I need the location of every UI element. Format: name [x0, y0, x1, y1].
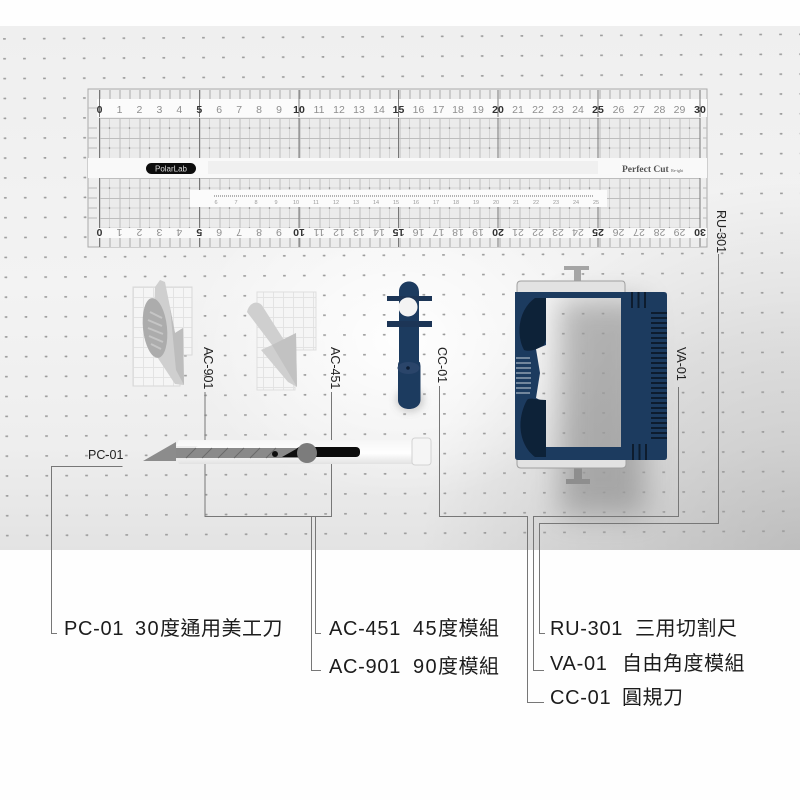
ruler bottom inverted scale numbers: 5	[196, 226, 202, 238]
connector lines	[52, 254, 718, 702]
legend: CC-01: 圓規刀	[622, 686, 684, 709]
ruler bottom inverted scale numbers: 13	[353, 226, 365, 238]
ruler top scale numbers: 5	[196, 104, 202, 116]
legend: VA-01: 自由角度模組	[622, 652, 745, 675]
connector: PC-01	[52, 466, 122, 634]
ruler top scale numbers: 10	[293, 104, 305, 116]
ruler bottom inverted scale numbers: 30	[694, 226, 706, 238]
ruler top scale numbers: 13	[353, 104, 365, 116]
ruler top scale numbers: 1	[117, 104, 123, 116]
ruler inner angle scale numbers: 13	[353, 200, 359, 206]
dark recesses	[519, 298, 546, 457]
bottom thumb screw	[566, 468, 590, 484]
ruler inner angle scale numbers: 8	[254, 200, 258, 206]
ruler bottom inverted scale numbers: 28	[654, 226, 665, 238]
ruler top scale numbers	[97, 104, 706, 116]
ruler top scale numbers: 16	[413, 104, 424, 116]
ruler bottom inverted scale numbers: 18	[452, 226, 464, 238]
ruler bottom inverted scale numbers: 22	[532, 226, 544, 238]
legend: PC-01: PC-01	[64, 618, 124, 640]
ruler top scale numbers: 15	[393, 104, 404, 116]
ruler inner angle scale numbers: 21	[513, 200, 519, 206]
ruler top scale numbers: 0	[97, 104, 103, 116]
ruler bottom inverted scale numbers: 4	[176, 226, 182, 238]
connector: RU-301	[540, 254, 718, 634]
ruler top scale numbers: 3	[156, 104, 162, 116]
panel: utility knife PC-01	[143, 438, 431, 465]
vertical vent slots	[632, 292, 646, 460]
legend: RU-301: 三用切割尺	[635, 617, 738, 640]
clear top and bottom plates	[517, 281, 626, 468]
vertical label: CC-01: CC-01	[435, 347, 449, 383]
ruler inner angle scale numbers: 18	[453, 200, 459, 206]
legend: VA-01	[550, 652, 745, 675]
vertical label: VA-01: VA-01	[674, 347, 688, 381]
ruler inner angle scale numbers: 12	[333, 200, 339, 206]
legend: RU-301	[550, 617, 738, 640]
PolarLab badge: PolarLab	[155, 164, 188, 174]
ruler inner angle scale numbers: 11	[313, 200, 319, 206]
ruler top scale numbers: 20	[492, 104, 504, 116]
legend: PC-01	[64, 617, 283, 640]
ruler top scale numbers: 22	[532, 104, 544, 116]
navy frame	[515, 292, 667, 460]
horizontal label: PC-01: PC-01	[88, 448, 123, 462]
ruler bottom inverted scale numbers	[96, 226, 706, 238]
ruler top scale numbers: 11	[314, 104, 325, 116]
ruler bottom inverted scale numbers: 1	[116, 226, 122, 238]
ruler top scale numbers: 25	[592, 104, 604, 116]
ruler bottom inverted scale numbers: 19	[472, 226, 484, 238]
ruler inner angle scale numbers: 9	[274, 200, 278, 206]
ruler bottom inverted scale numbers: 21	[512, 226, 524, 238]
ruler top scale numbers: 28	[654, 104, 665, 116]
ruler inner angle scale numbers: 15	[393, 200, 399, 206]
connector: AC-901 to label	[312, 516, 321, 670]
ruler top scale numbers: 18	[452, 104, 464, 116]
vertical label: AC-901: AC-901	[201, 347, 215, 389]
blade slot and blade segments	[176, 448, 300, 458]
vertical label: AC-451: AC-451	[328, 347, 342, 389]
ruler bottom inverted scale numbers: 10	[293, 226, 305, 238]
ruler bottom inverted scale numbers: 14	[373, 226, 385, 238]
left grip teeth	[516, 358, 531, 393]
ruler bottom inverted scale numbers: 26	[613, 226, 624, 238]
right vent slots	[651, 313, 667, 438]
ruler bottom inverted scale numbers: 24	[572, 226, 584, 238]
ruler bottom inverted scale numbers: 3	[156, 226, 162, 238]
ruler bottom inverted scale numbers: 8	[256, 226, 262, 238]
ruler top scale numbers: 26	[613, 104, 624, 116]
ruler bottom inverted scale numbers: 16	[413, 226, 424, 238]
ruler top scale numbers: 6	[216, 104, 222, 116]
ruler bottom inverted scale numbers: 7	[236, 226, 242, 238]
legend: CC-01: CC-01	[550, 687, 611, 709]
ruler bottom inverted scale numbers: 12	[333, 226, 345, 238]
ruler top scale numbers: 14	[373, 104, 385, 116]
ruler top scale numbers: 19	[472, 104, 484, 116]
ruler inner angle scale numbers: 6	[214, 200, 218, 206]
ruler bottom inverted scale numbers: 15	[393, 226, 404, 238]
ruler top scale numbers: 2	[136, 104, 142, 116]
knife blade	[143, 442, 176, 461]
connector: CC-01	[440, 386, 544, 702]
ruler inner angle scale numbers: 7	[234, 200, 238, 206]
legend: AC-451	[329, 617, 500, 640]
ruler top scale numbers: 24	[572, 104, 584, 116]
ruler bottom inverted scale numbers: 25	[592, 226, 604, 238]
panel: ruler RU-301	[88, 89, 707, 247]
ruler top scale numbers: 8	[256, 104, 262, 116]
slider slot	[296, 447, 360, 457]
ruler inner angle scale numbers: 19	[473, 200, 479, 206]
legend: AC-901	[329, 655, 500, 678]
connector: AC-451 to label	[316, 516, 321, 634]
ruler top scale numbers: 12	[333, 104, 345, 116]
ruler top scale numbers: 17	[433, 104, 444, 116]
ruler bottom inverted scale numbers: 9	[276, 226, 282, 238]
ruler bottom inverted scale numbers: 11	[313, 226, 324, 238]
ruler inner angle scale numbers: 10	[293, 200, 299, 206]
ruler bottom inverted scale numbers: 29	[674, 226, 685, 238]
legend: CC-01	[550, 686, 684, 709]
connector: VA-01	[534, 387, 678, 670]
ruler bottom inverted scale numbers: 6	[216, 226, 222, 238]
ruler inner angle scale numbers: 17	[433, 200, 439, 206]
ruler bottom inverted scale numbers: 20	[492, 226, 504, 238]
top thumb screw	[564, 266, 589, 282]
ruler top scale numbers: 7	[236, 104, 242, 116]
legend: AC-451: AC-451	[329, 618, 401, 640]
panel: module AC-451	[247, 292, 316, 390]
legend: AC-901: AC-901	[329, 656, 401, 678]
end cap	[412, 438, 431, 465]
knife body	[176, 440, 414, 464]
connector: AC-901 and AC-451 bracket	[205, 392, 332, 516]
ruler inner angle scale numbers	[214, 200, 599, 206]
Perfect Cut wordmark: Perfect Cut Re-ight	[622, 165, 684, 175]
slider knob	[297, 443, 317, 463]
panel: module AC-901	[133, 280, 192, 386]
ruler bottom inverted scale numbers: 17	[433, 226, 444, 238]
legend: PC-01: 30度通用美工刀	[135, 617, 283, 640]
panel: circle cutter CC-01	[387, 282, 432, 412]
legend: AC-451: 45度模組	[413, 617, 500, 640]
ruler bottom inverted scale numbers: 0	[96, 226, 102, 238]
ruler bottom inverted scale numbers: 23	[552, 226, 564, 238]
legend: VA-01: VA-01	[550, 653, 608, 675]
ruler inner angle scale numbers: 24	[573, 200, 579, 206]
ruler bottom inverted scale numbers: 2	[136, 226, 142, 238]
ruler top scale numbers: 30	[694, 104, 706, 116]
ruler top scale numbers: 23	[552, 104, 564, 116]
ruler inner angle scale numbers: 22	[533, 200, 539, 206]
ruler inner angle scale numbers: 16	[413, 200, 419, 206]
ruler top scale numbers: 9	[276, 104, 282, 116]
legend: RU-301: RU-301	[550, 618, 623, 640]
ruler bottom inverted scale numbers: 27	[633, 226, 645, 238]
PolarLab badge	[146, 163, 196, 174]
ruler top scale numbers: 4	[176, 104, 182, 116]
ruler inner angle scale numbers: 20	[493, 200, 499, 206]
vertical label: RU-301: RU-301	[714, 210, 728, 253]
ruler inner angle scale numbers: 14	[373, 200, 379, 206]
ruler inner angle scale numbers: 23	[553, 200, 559, 206]
ruler top scale numbers: 29	[674, 104, 685, 116]
legend: AC-901: 90度模組	[413, 655, 500, 678]
ruler top scale numbers: 21	[512, 104, 524, 116]
panel: free-angle module VA-01	[515, 266, 667, 484]
ruler inner angle scale numbers: 25	[593, 200, 599, 206]
ruler top scale numbers: 27	[633, 104, 645, 116]
